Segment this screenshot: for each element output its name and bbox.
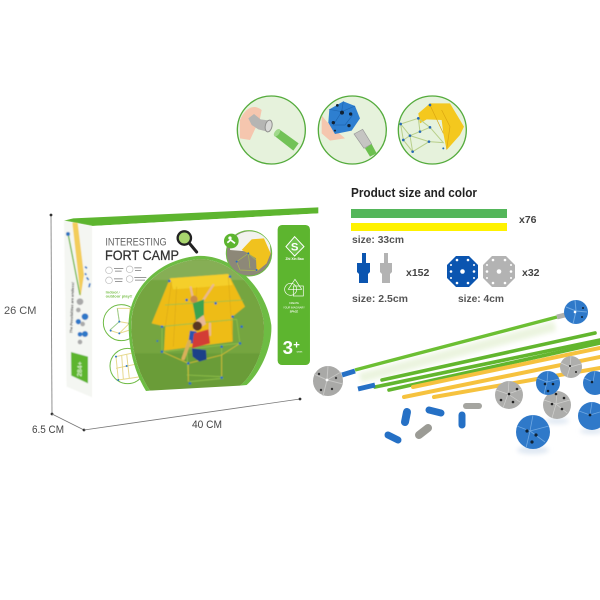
- icon: grey octagon connector ball: [483, 256, 515, 287]
- package box: [64, 207, 319, 397]
- loose connectors: [388, 406, 479, 440]
- label: x32: x32: [522, 267, 540, 279]
- assembly step circles: [237, 96, 466, 164]
- icon: blue connector: [357, 253, 370, 283]
- dimension: height line: [50, 214, 53, 415]
- green brand panel: [278, 225, 310, 365]
- label: x76: x76: [519, 214, 537, 226]
- loose balls: [495, 356, 600, 454]
- loose blue connector: [358, 385, 375, 389]
- label: size 33cm: size: 33cm: [352, 234, 404, 246]
- children: [191, 285, 213, 300]
- label: x152: x152: [406, 267, 430, 279]
- create caption: YOUR IMAGINARY: [283, 306, 305, 309]
- label: size 4cm: size: 4cm: [458, 293, 504, 305]
- dimension: depth line: [52, 414, 85, 431]
- brand logo: [285, 237, 304, 261]
- yellow rod: [351, 223, 507, 231]
- grey balls: [495, 356, 582, 419]
- create caption: CREATE: [289, 302, 299, 305]
- age label: years: [297, 350, 303, 353]
- icon: magnifier: [178, 231, 197, 252]
- heading: product size and color: Product size and color: [351, 186, 477, 200]
- infographic canvas: [4, 95, 600, 456]
- indoor outdoor label: [106, 289, 132, 299]
- box side face: 284+: [77, 361, 84, 377]
- ball facets: [496, 356, 581, 418]
- blue ball top: [564, 300, 588, 324]
- green rod: [351, 209, 507, 218]
- indoor outdoor label: Indoor♪: [106, 289, 120, 294]
- icon: geometric shapes: [285, 279, 303, 296]
- age label: [283, 337, 303, 358]
- dimension: width line: [84, 398, 301, 430]
- icon: grey connector: [380, 253, 392, 283]
- tent canvas: [152, 274, 245, 351]
- age label: 3: [283, 337, 293, 358]
- brand logo: Zhi Xin Bao: [285, 257, 304, 261]
- fort frame: [160, 300, 243, 382]
- age label: +: [293, 339, 300, 351]
- step 3: mini fort: [398, 96, 466, 164]
- assembled rod with balls: [313, 300, 588, 396]
- box side face: The Possibilities are endless!: [69, 281, 75, 333]
- label: size 2.5cm: size: 2.5cm: [352, 293, 408, 305]
- inset photo: [226, 231, 272, 276]
- create caption: [283, 302, 305, 313]
- soft ball shadows: [517, 418, 600, 454]
- box top face: [64, 207, 318, 226]
- indoor outdoor label: outdoor play!!: [106, 294, 132, 299]
- label: 26 CM: 26 CM: [4, 305, 36, 317]
- label: 40 CM: 40 CM: [192, 419, 222, 431]
- box front face: [92, 213, 319, 397]
- icon: blue octagon connector ball: [447, 256, 478, 287]
- grey ball: [313, 366, 343, 396]
- badge: 284 pieces icon: [224, 234, 239, 248]
- box side face: [64, 221, 92, 397]
- step 2: connector into ball: [318, 96, 386, 164]
- blue balls: [516, 371, 600, 449]
- box title: [105, 236, 179, 263]
- brand logo: S: [291, 241, 299, 253]
- box title: FORT CAMP: [105, 248, 179, 263]
- product parts photo: [313, 300, 600, 454]
- box title: INTERESTING: [105, 236, 167, 248]
- label: 6.5 CM: 6.5 CM: [32, 424, 64, 436]
- feature badges: [106, 266, 146, 284]
- yellow rods: [404, 348, 600, 397]
- create caption: SPACE: [290, 310, 299, 313]
- fort diagram circles: [103, 305, 145, 384]
- main photo: fort on grass: [127, 253, 273, 393]
- step 1: connector into tube: [237, 96, 305, 164]
- green rods: [375, 333, 600, 390]
